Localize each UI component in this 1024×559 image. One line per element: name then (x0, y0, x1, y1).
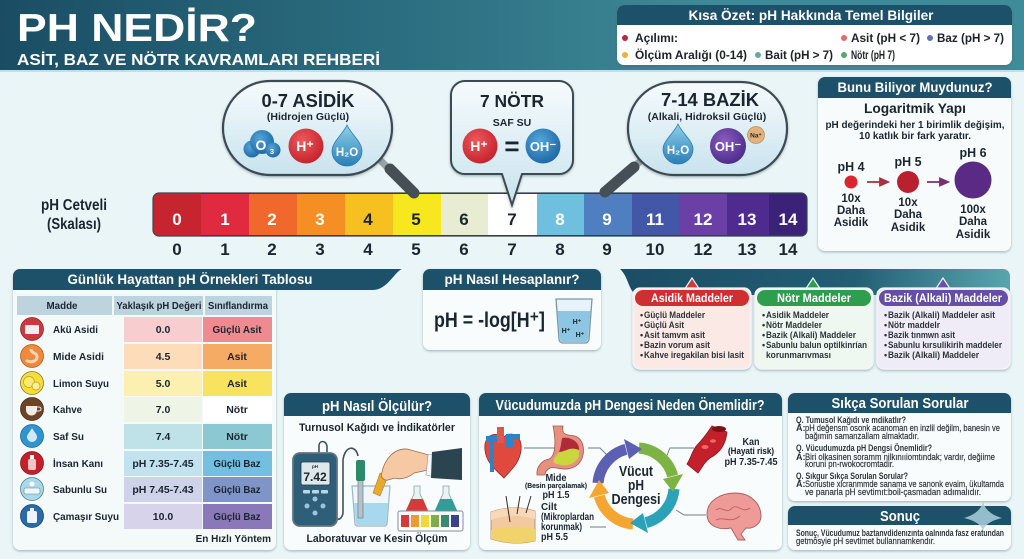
panel: quick summary: Ölçüm Aralığı (0-14) (635, 49, 747, 62)
icon: OH-: OH⁻ (715, 139, 741, 154)
question 3 (796, 471, 1004, 497)
pH 4: Daha (837, 205, 866, 217)
row: stomach acid: Asit (227, 351, 247, 363)
magnifier: basic (605, 82, 787, 192)
row: pure water: 7.4 (156, 431, 170, 443)
row: lemon juice (20, 371, 272, 396)
scale numbers: 12 (694, 240, 712, 259)
chart: pH colour scale: 12 (694, 210, 712, 229)
panel: pH examples table (13, 269, 402, 550)
row: human blood: Güçlü Baz (214, 458, 260, 470)
panel: quick summary: Kısa Özet: pH Hakkında Temel Bilgiler (688, 8, 934, 23)
label: stomach: Mide (546, 472, 567, 484)
scale numbers: 6 (459, 240, 469, 259)
card: neutral: • (762, 310, 765, 320)
card: basic: Bazik (Alkali) Maddeler (888, 350, 979, 360)
chart: pH colour scale: 3 (315, 210, 325, 229)
row: stomach acid (20, 344, 272, 369)
icon: pH meter: 7.42 (303, 470, 327, 484)
panel: FAQ: Sıkça Sorulan Sorular (832, 395, 969, 412)
pH 6: Daha (959, 216, 988, 228)
table note: En Hızlı Yöntem (196, 534, 271, 545)
row: pure water (20, 424, 272, 449)
pH 4: Asidik (834, 217, 869, 229)
icon: litmus strip (373, 473, 388, 496)
chart: pH colour scale: 2 (267, 210, 277, 229)
row: coffee (20, 397, 272, 422)
row: soapy water: Güçlü Baz (214, 484, 260, 496)
card: neutral: Sabunlu balun optilkinrían (766, 340, 867, 350)
chart: pH colour scale: 8 (555, 210, 565, 229)
icon: H+: H⁺ (470, 138, 488, 154)
row: stomach acid: 4.5 (156, 351, 170, 363)
label: blood: pH 7.35-7.45 (724, 456, 778, 468)
icon: pH meter: pH (312, 464, 318, 469)
card: neutral: • (762, 330, 765, 340)
card: acidic: Asit tamvm asit (644, 330, 705, 340)
header banner (0, 0, 1024, 72)
acidic heading: 0-7 ASİDİK (262, 91, 354, 111)
card: basic: Bazik (Alkali) Maddeler (884, 291, 1002, 305)
card: acidic (633, 278, 751, 369)
row: human blood: İnsan Kanı (53, 457, 103, 470)
panel: quick summary: Baz (pH > 7) (937, 33, 1004, 45)
pH 6: pH 6 (960, 146, 987, 160)
label: blood: Kan (742, 436, 760, 448)
magnifier: acidic (223, 81, 414, 193)
table header row: Yaklaşık pH Değeri (116, 301, 202, 312)
card: basic (877, 278, 1010, 369)
panel: pH calculation (423, 269, 601, 350)
panel: body pH balance: Vücudumuzda pH Dengesi Neden Önemlidir? (496, 397, 765, 414)
icon: stomach (537, 426, 584, 475)
panel: conclusion (788, 501, 1011, 550)
scale numbers: 9 (602, 240, 612, 259)
card: basic: • (884, 320, 887, 330)
question 1: bağımın samanzallam almaktadır. (805, 431, 919, 441)
card: acidic: Asidik Maddeler (651, 291, 733, 305)
panel: quick summary: Açılımı: (635, 33, 678, 45)
icon: hydrogen ion: H⁺ (296, 138, 314, 154)
row: battery acid: Güçlü Asit (212, 324, 262, 336)
row: lemon juice: 5.0 (156, 378, 170, 390)
panel: pH measurement: pH Nasıl Ölçülür? (322, 398, 432, 415)
icon: water drop: H₂O (667, 145, 689, 157)
card: acidic: • (640, 350, 643, 360)
panel: did you know: Bunu Biliyor Muydunuz? (838, 79, 992, 95)
panel: substance types (620, 269, 1010, 369)
row: stomach acid: Mide Asidi (53, 351, 104, 363)
card: neutral: Nötr Maddeler (766, 320, 822, 330)
scale numbers: 13 (738, 240, 756, 259)
card: acidic: Güçlü Asit (644, 320, 684, 330)
row: coffee: Nötr (226, 404, 248, 416)
icon: sodium (748, 126, 764, 144)
icon: blood vessel (687, 426, 727, 473)
panel: did you know: pH değerindeki her 1 birimlik değişim, (826, 119, 1005, 131)
callout: neutral (451, 81, 573, 205)
cycle arrows (589, 439, 683, 533)
table header row (17, 296, 272, 315)
row: coffee: 7.0 (156, 404, 170, 416)
row: human blood (20, 451, 272, 476)
pH 6: Asidik (956, 229, 991, 241)
question 1 (796, 415, 1000, 441)
scale numbers: 2 (267, 240, 277, 259)
label: skin: korunmak) (541, 522, 582, 533)
scale numbers: 14 (779, 240, 798, 259)
panel: did you know (818, 77, 1011, 251)
callout: neutral: 7 NÖTR (480, 91, 544, 111)
chart: pH colour scale: 7 (507, 210, 517, 229)
table heading: Günlük Hayattan pH Örnekleri Tablosu (68, 272, 312, 287)
basic heading: 7-14 BAZİK (661, 89, 760, 110)
card: acidic: • (640, 310, 643, 320)
icon: pH meter (293, 453, 337, 526)
cycle label (612, 463, 660, 508)
icon: water drop (332, 125, 362, 166)
scale numbers: 8 (555, 240, 565, 259)
question 3: ve panarla pH sevtimıt:boil-çasmadan adımalıdır. (805, 487, 981, 497)
icon: OH- (710, 128, 746, 164)
chart: pH colour scale (153, 193, 807, 236)
row: lemon juice: Asit (227, 378, 247, 390)
pH 6 (954, 146, 992, 241)
label: blood: (Hayati risk) (728, 446, 774, 456)
card: acidic: • (640, 330, 643, 340)
row: soapy water (20, 477, 272, 502)
label: pH scale: (Skalası) (47, 216, 101, 233)
label: stomach: pH 1.5 (542, 489, 570, 501)
question 2: Q. Vücudumuzda pH Dengsi Önemlidir? (796, 443, 932, 453)
table heading (13, 269, 402, 290)
row: pure water: Nötr (226, 431, 248, 443)
panel: FAQ (788, 393, 1011, 501)
card: basic: Nötr maddelr (888, 320, 940, 330)
subtitle: ASİT, BAZ VE NÖTR KAVRAMLARI REHBERİ (17, 50, 380, 69)
icon: colour chart (398, 511, 463, 531)
panel: pH measurement (284, 393, 470, 550)
card: acidic: Bazin vorum asit (644, 340, 710, 350)
panel: pH measurement: Turnusol Kağıdı ve İndikatörler (299, 421, 456, 434)
question 3: Q. Sıkgur Sıkça Sorulan Sorular? (796, 471, 908, 481)
card: neutral (755, 278, 873, 369)
label: pH scale (41, 197, 107, 233)
icon: OH-: OH⁻ (530, 139, 556, 154)
row: battery acid: Akü Asidi (53, 324, 98, 336)
card: acidic: • (640, 340, 643, 350)
icon: water drop (663, 124, 693, 164)
icon: beaker and probe (352, 460, 390, 526)
question 2: Biri olkasinen soramm nilkınııiomtındak; vardır, değiime (805, 452, 995, 462)
card: neutral: Bazik (Alkali) Maddeler (766, 330, 856, 340)
icon: star (964, 501, 1002, 531)
scale numbers: 0 (172, 240, 182, 259)
panel: did you know: Logaritmik Yapı (864, 100, 966, 116)
icon: beaker (556, 299, 592, 343)
icon: hydrogen ion (288, 128, 324, 164)
label: skin: pH 5.5 (541, 531, 568, 543)
card: acidic: Güçlü Maddeler (644, 310, 705, 320)
label: stomach (525, 472, 587, 501)
scale numbers: 10 (646, 240, 664, 259)
magnifier: acidic: (Hidrojen Güçlü) (267, 111, 349, 123)
question 1: Q. Tumusol Kağıdı ve mdikatlır? (796, 415, 906, 425)
pH 5: Daha (894, 209, 923, 221)
question 2 (796, 443, 995, 469)
icon: ozone: 3 (270, 147, 274, 156)
panel: quick summary: Nötr (pH 7) (851, 50, 895, 62)
equals: = (504, 131, 520, 161)
icon: heart (485, 427, 521, 478)
formula: pH = -log[H⁺] (434, 309, 545, 332)
label: skin: Cilt (541, 501, 557, 513)
card: basic: Bazik tınmwn asit (888, 330, 955, 340)
scale numbers (172, 240, 798, 259)
card: neutral: korunmarıvması (766, 350, 831, 360)
icon: ozone: O (256, 137, 267, 153)
panel: pH calculation: pH Nasıl Hesaplanır? (444, 272, 580, 287)
icon: water drop: H₂O (336, 147, 358, 159)
panel: body pH balance (479, 393, 782, 550)
icon: beaker: H⁺ (562, 328, 571, 335)
card: neutral: Nötr Maddeler (777, 291, 851, 305)
pH 5: Asidik (891, 222, 926, 234)
question 3: A: (796, 479, 806, 489)
card: acidic: • (640, 320, 643, 330)
icon: skin (491, 496, 535, 543)
label: skin (541, 501, 594, 543)
card: basic: • (884, 310, 887, 320)
icon: sodium: Na⁺ (750, 132, 762, 140)
icon: hand (381, 448, 462, 480)
question 2: koruni pn-rwokocromtadir. (805, 459, 894, 469)
pH 5: 10x (898, 197, 918, 209)
row: human blood: pH 7.35-7.45 (132, 458, 194, 470)
card: basic: • (884, 340, 887, 350)
chart: pH colour scale: 4 (363, 210, 373, 229)
row: bleach: Güçlü Baz (214, 511, 260, 523)
row: lemon juice: Limon Suyu (53, 378, 109, 390)
title: PH NEDİR? (17, 7, 257, 50)
row: bleach: Çamaşır Suyu (53, 511, 119, 523)
scale numbers: 1 (220, 240, 230, 259)
panel: quick summary: Bait (pH > 7) (765, 50, 833, 62)
scale numbers: 5 (411, 240, 421, 259)
icon: ozone (244, 130, 280, 158)
band header (620, 269, 1010, 295)
arrow (927, 178, 948, 186)
pH 5 (891, 155, 926, 234)
scale numbers: 3 (315, 240, 325, 259)
row: bleach: 10.0 (153, 511, 173, 523)
card: basic: Bazik (Alkali) Maddeler asit (888, 310, 995, 320)
magnifier: basic: (Alkali, Hidroksil Güçlü) (648, 111, 766, 123)
panel: quick summary (617, 5, 1012, 65)
row: soapy water: pH 7.45-7.43 (132, 484, 194, 496)
chart: pH colour scale: 0 (172, 210, 182, 229)
table header row: Sınıflandırma (208, 301, 268, 312)
arrow (867, 178, 888, 186)
card: neutral: • (762, 320, 765, 330)
connector lines (524, 448, 706, 527)
chart: pH colour scale: 6 (459, 210, 469, 229)
pH 4 (834, 160, 869, 229)
card: basic: • (884, 330, 887, 340)
card: neutral: Asidik Maddeler (766, 310, 829, 320)
scale numbers: 4 (363, 240, 373, 259)
card: neutral: • (762, 340, 765, 350)
cycle label: Vücut (619, 463, 653, 480)
icon: brain (707, 493, 761, 540)
question 1: A: (796, 423, 806, 433)
panel: conclusion: Sonuç (880, 508, 920, 525)
row: bleach (20, 504, 272, 529)
row: pure water: Saf Su (53, 431, 84, 443)
panel: conclusion: getmösyie pH sevtimet bullannamkendır. (796, 536, 935, 546)
label: skin: (Mikroplardan (541, 512, 594, 523)
pH 6: 100x (960, 204, 986, 216)
cycle label: Dengesi (612, 491, 660, 508)
label: blood (724, 436, 778, 468)
card: basic: Sabunlu kırsulikirih maddeler (888, 340, 1002, 350)
label: stomach: (Besin parçalamak) (525, 481, 587, 490)
chart: pH colour scale: 11 (646, 210, 664, 229)
scale numbers: 7 (507, 240, 517, 259)
chart: pH colour scale: 9 (602, 210, 612, 229)
pH 4: 10x (841, 193, 861, 205)
icon: beaker: H⁺ (576, 332, 585, 339)
card: acidic: Kahve iregakilan bisi lasit (644, 350, 744, 360)
card: basic: • (884, 350, 887, 360)
panel: pH measurement: Laboratuvar ve Kesin Ölçüm (306, 532, 448, 545)
icon: beaker: H⁺ (573, 319, 582, 326)
pH 4: pH 4 (838, 160, 865, 174)
pH 5: pH 5 (894, 155, 922, 169)
label: pH scale: pH Cetveli (41, 197, 107, 214)
chart: pH colour scale: 13 (738, 210, 756, 229)
question 2: A: (796, 452, 806, 462)
callout: neutral: SAF SU (493, 117, 531, 129)
panel: did you know: 10 katlık bir fark yaratır. (859, 130, 971, 142)
chart: pH colour scale: 14 (779, 210, 798, 229)
chart: pH colour scale: 1 (220, 210, 230, 229)
row: battery acid (20, 317, 272, 342)
cycle label: pH (628, 477, 644, 494)
row: soapy water: Sabunlu Su (53, 484, 107, 496)
icon: cable (319, 442, 358, 519)
icon: flasks (406, 486, 457, 511)
row: coffee: Kahve (53, 404, 82, 416)
row: battery acid: 0.0 (156, 324, 170, 336)
panel: quick summary: Asit (pH < 7) (851, 33, 920, 45)
chart: pH colour scale: 5 (411, 210, 421, 229)
table header row: Madde (46, 301, 78, 312)
